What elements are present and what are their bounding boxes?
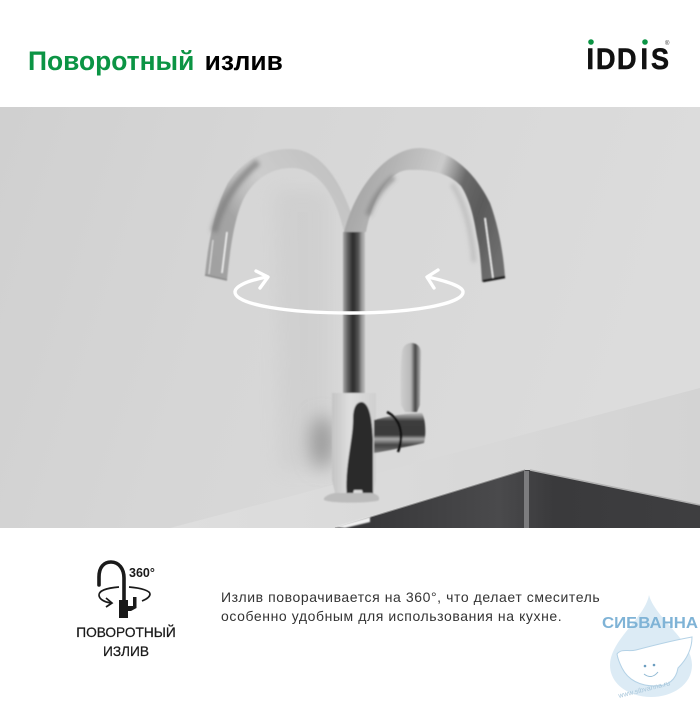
left spout position [205,149,356,280]
riser stem [343,232,365,396]
watermark: Сибванна: www.sibvanna.ru [617,680,671,700]
lever handle [401,343,421,412]
rotation arrows [235,270,463,313]
handle connector [374,413,425,453]
description text: Излив поворачивается на 360°, что делает смеситель [221,588,600,604]
base ring [324,493,379,503]
icon label: ПОВОРОТНЫЙ [76,625,176,640]
title: Поворотный излив [28,46,283,76]
icon label [76,624,176,658]
right spout position [344,148,505,282]
description text [221,588,600,624]
icon: faucet with 360 degree rotation: 360° [129,566,155,580]
faucet shadow on wall [275,190,333,470]
faucet body [332,393,376,497]
icon label: ИЗЛИВ [103,644,149,658]
watermark: Сибванна: СИБВАННА [602,615,698,632]
countertop [170,388,700,528]
description text: особенно удобным для использования на кухне. [221,608,562,624]
photo: rotating faucet in kitchen [0,107,700,528]
faucet [205,148,505,528]
sink basin [335,470,700,528]
counter edge reflection [335,517,370,528]
icon: faucet with 360 degree rotation [97,560,155,618]
brand logo: IDDIS: ® [665,40,670,47]
wall background [0,107,700,528]
watermark: Сибванна [602,596,698,700]
